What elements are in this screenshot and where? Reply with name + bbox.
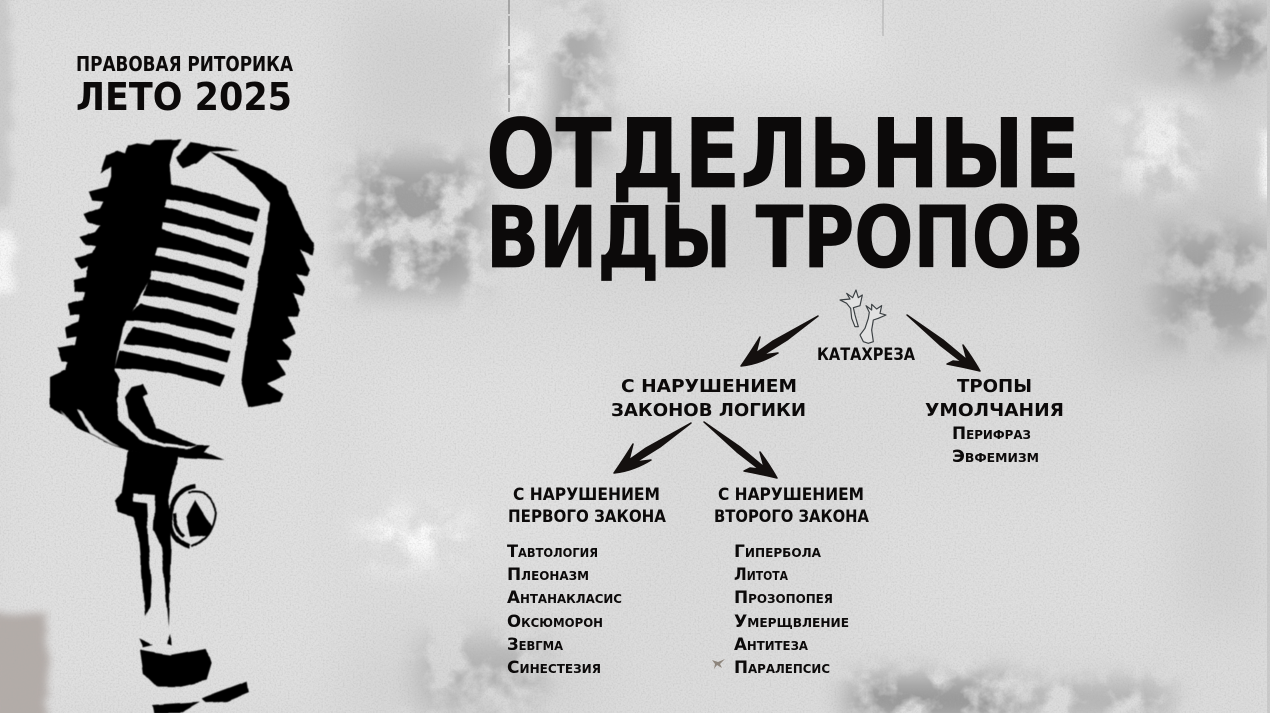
node line 2: ЗАКОНОВ ЛОГИКИ [611,400,806,421]
node: tropes of omission [925,376,1064,467]
arrow: logic to first law [614,423,691,473]
microphone stand [115,450,248,713]
item: Антанакласис [507,588,622,608]
column: first law violations [507,485,666,678]
item: Плеоназм [507,565,589,585]
column heading line 2: ПЕРВОГО ЗАКОНА [508,507,666,526]
course name: ПРАВОВАЯ РИТОРИКА [76,52,293,76]
item: Паралепсис [734,658,830,678]
label: catachresis: КАТАХРЕЗА [817,345,916,365]
node: violation of the laws of logic [611,376,806,421]
icon: vintage microphone [50,139,314,713]
item: Синестезия [507,658,601,678]
microphone cradle [50,370,225,460]
node line 1: С НАРУШЕНИЕМ [621,376,797,397]
column: second law violations [714,485,869,678]
heading line 1: ОТДЕЛЬНЫЕ [486,100,1080,210]
mottled plaster stains [350,10,1270,713]
item: Антитеза [734,635,809,655]
course label [76,52,293,119]
item: Тавтология [507,542,598,562]
item: Умерщвление [734,612,849,632]
arrow: logic to second law [704,422,777,478]
item: Перифраз [952,424,1031,444]
item: Прозопопея [734,588,833,608]
microphone head [50,139,314,408]
arrow: catachresis to logic violations [741,316,818,366]
node line 1: ТРОПЫ [957,376,1032,397]
item: Эвфемизм [952,447,1039,467]
column heading line 1: С НАРУШЕНИЕМ [513,485,660,504]
icon: catachresis plant hands [840,290,886,343]
node line 2: УМОЛЧАНИЯ [925,400,1064,421]
column heading line 2: ВТОРОГО ЗАКОНА [714,507,869,526]
item: Оксюморон [507,612,603,632]
course season: ЛЕТО 2025 [76,75,292,119]
arrow: catachresis to tropes of omission [907,315,980,371]
item: Литота [734,565,789,585]
column heading line 1: С НАРУШЕНИЕМ [718,485,864,504]
heading [486,100,1084,288]
item: Зевгма [507,635,564,655]
heading line 2: ВИДЫ ТРОПОВ [486,189,1084,288]
wall speck near last item [712,659,725,669]
item: Гипербола [734,542,822,562]
